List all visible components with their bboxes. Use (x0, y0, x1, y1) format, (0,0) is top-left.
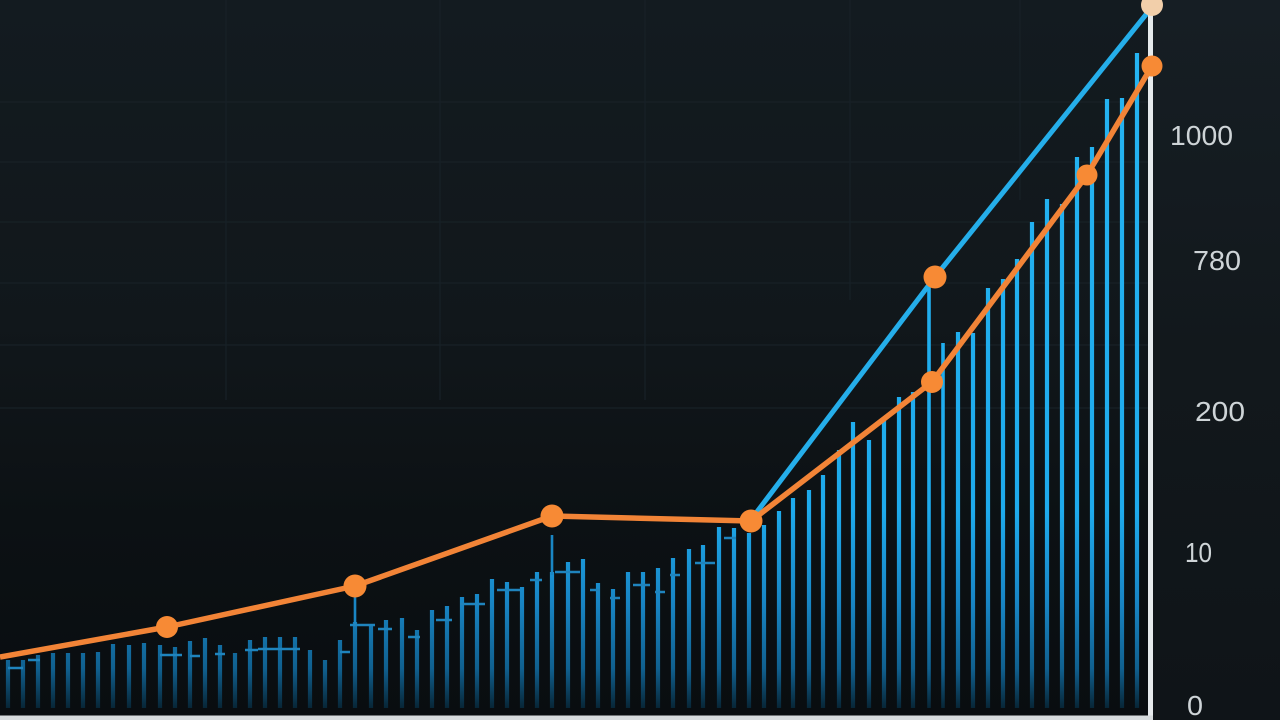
axis labels: right value scale (1170, 120, 1245, 720)
axis labels: right value scale: 1000 (1170, 120, 1233, 151)
axis labels: right value scale: 780 (1193, 245, 1241, 276)
marker: cream end point (1141, 0, 1163, 16)
line: blue series (750, 7, 1152, 521)
axis labels: right value scale: 200 (1195, 396, 1245, 427)
axis labels: right value scale: 10 (1185, 537, 1212, 568)
markers: orange data points (156, 56, 1162, 638)
line: orange series (0, 66, 1152, 657)
